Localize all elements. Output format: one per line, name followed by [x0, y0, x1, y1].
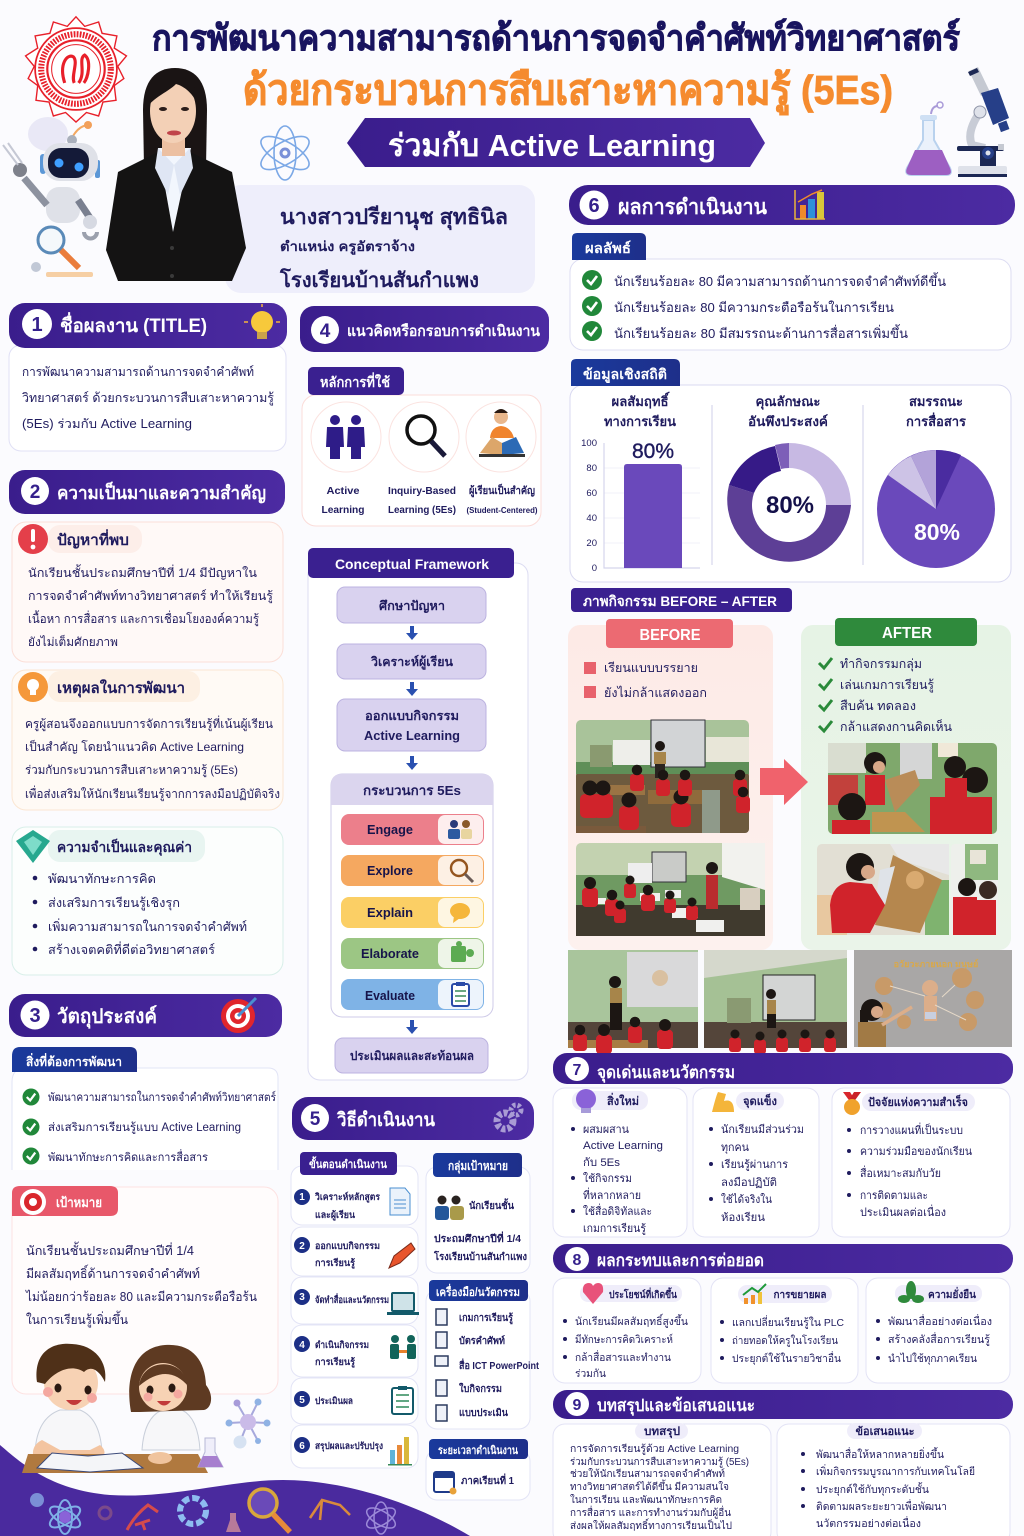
card: goal: นักเรียนชั้นประถมศึกษาปีที่ 1/4	[26, 1241, 194, 1258]
header 9	[553, 1390, 1013, 1419]
banner: with active learning: ร่วมกับ Active Learning	[388, 128, 716, 163]
card: problem: การจดจำคำศัพท์ทางวิทยาศาสตร์ ทำให้เรียนรู้	[28, 589, 274, 604]
illustration: two students reading	[22, 1344, 223, 1473]
panel: after: กล้าแสดงกานคิดเห็น	[840, 719, 952, 734]
tab: after: AFTER	[882, 625, 932, 642]
card: benefits: มีทักษะการคิดวิเคราะห์	[575, 1333, 673, 1346]
card: statistics: คุณลักษณะ	[756, 394, 821, 410]
steps list: 4	[299, 1340, 305, 1351]
banner: with active learning	[347, 118, 765, 167]
duration card: ภาคเรียนที่ 1	[461, 1473, 514, 1487]
icon: magnifier	[407, 416, 445, 456]
icons: science decorations	[30, 1489, 398, 1534]
icon: gears	[497, 1105, 521, 1129]
panel: 5Es process: กระบวนการ 5Es	[363, 783, 461, 798]
header 4: 4	[320, 321, 331, 342]
card: new things: ผสมผสาน	[583, 1124, 629, 1136]
icon: people	[326, 415, 365, 459]
photo: teacher at screen 2	[704, 950, 847, 1054]
card: principles: Learning	[322, 504, 364, 516]
steps list: การเรียนรู้	[315, 1257, 356, 1270]
target group card: ประถมศึกษาปีที่ 1/4	[434, 1231, 521, 1245]
header 2	[9, 470, 285, 514]
panel: before: เรียนแบบบรรยาย	[604, 661, 698, 675]
step: evaluate	[341, 979, 484, 1010]
card: strengths: ใช้ได้จริงใน	[721, 1193, 772, 1206]
donut chart: desired characteristics: 80%	[766, 492, 814, 519]
card: conclusion: การสื่อสาร และการทำงานร่วมกับผู้อื่น	[570, 1505, 731, 1519]
card: statistics: ทางการเรียน	[604, 414, 676, 429]
card: benefits: ร่วมกัน	[575, 1368, 606, 1380]
step icons	[387, 1188, 419, 1466]
steps list: ดำเนินกิจกรรม	[315, 1340, 369, 1351]
photo: teacher pointing at body diagram: อวัยวะภายนอก มนุษย์	[894, 958, 978, 970]
illustration: robot	[3, 117, 100, 277]
header 3: วัตถุประสงค์	[57, 1005, 157, 1029]
bar chart: learning achievement: 100	[581, 438, 597, 449]
tab: outcomes	[572, 233, 646, 260]
card: rationale: เป็นสำคัญ โดยนำแนวคิด Active Learning	[25, 739, 244, 754]
header 6: ผลการดำเนินงาน	[618, 196, 768, 219]
panel: 5Es process	[331, 774, 493, 1017]
title line 2: ด้วยกระบวนการสืบเสาะหาความรู้ (5Es)	[243, 67, 893, 116]
steps list: สรุปผลและปรับปรุง	[315, 1440, 383, 1452]
card: success factors: การวางแผนที่เป็นระบบ	[860, 1122, 963, 1137]
tab: steps	[300, 1152, 397, 1175]
panel: before	[568, 619, 773, 950]
tab: tools: เครื่องมือ/นวัตกรรม	[436, 1283, 520, 1299]
card: success factors: สื่อเหมาะสมกับวัย	[860, 1165, 941, 1180]
header 8: 8	[573, 1252, 582, 1269]
card: sustainability: พัฒนาสื่ออย่างต่อเนื่อง	[888, 1314, 992, 1328]
steps list	[291, 1152, 419, 1468]
card: conclusion: ร่วมกับกระบวนการสืบเสาะหาความรู้ (5Es)	[570, 1456, 749, 1468]
icon: molecule	[226, 1398, 270, 1448]
card: strengths: จุดแข็ง	[743, 1093, 777, 1109]
icon: medal	[843, 1092, 861, 1115]
duration card	[426, 1439, 530, 1500]
card: principles	[302, 367, 541, 526]
steps list: 2	[299, 1241, 305, 1252]
card: benefits: นักเรียนมีผลสัมฤทธิ์สูงขึ้น	[575, 1313, 688, 1328]
step: elaborate	[341, 938, 484, 969]
card: development goals	[12, 1047, 278, 1170]
steps list: การเรียนรู้	[315, 1356, 356, 1369]
card: new things: สิ่งใหม่	[607, 1092, 639, 1108]
card: new things: ใช้กิจกรรม	[583, 1172, 632, 1185]
title line 1: การพัฒนาความสามารถด้านการจดจำคำศัพท์วิทยาศาสตร์	[152, 18, 960, 58]
card: strengths: เรียนรู้ผ่านการ	[721, 1158, 788, 1171]
school name: โรงเรียนบ้านสันกำแพง	[279, 267, 479, 292]
bar chart: learning achievement: 60	[586, 488, 597, 499]
icon: purple bulb	[576, 1089, 596, 1113]
card: success factors: การติดตามและ	[860, 1190, 928, 1202]
step: evaluate and reflect: ประเมินผลและสะท้อนผล	[350, 1049, 474, 1063]
card: benefits: ประโยชน์ที่เกิดขึ้น	[609, 1287, 677, 1301]
header 8: ผลกระทบและการต่อยอด	[597, 1251, 764, 1270]
teacher name: นางสาวปรียานุช สุทธินิล	[280, 205, 508, 231]
photo: classroom lecture 2	[576, 843, 765, 936]
tools and innovations card	[426, 1280, 540, 1429]
tab: principles used: หลักการที่ใช้	[320, 372, 390, 390]
card: recommendations	[777, 1423, 1010, 1536]
card: recommendations: ติดตามผลระยะยาวเพื่อพัฒนา	[816, 1499, 947, 1513]
card: rationale: ครูผู้สอนจึงออกแบบการจัดการเรียนรู้ที่เน้นผู้เรียน	[25, 715, 273, 732]
card: statistics: ผลสัมฤทธิ์	[612, 391, 670, 409]
bar chart: learning achievement: 20	[586, 538, 597, 549]
step: explain: Explain	[367, 905, 413, 920]
card: development goals: พัฒนาความสามารถในการจดจำคำศัพท์วิทยาศาสตร์	[48, 1090, 276, 1104]
card: new things	[553, 1088, 687, 1237]
step: analyse learners	[337, 644, 486, 679]
tab: conceptual framework	[308, 548, 514, 578]
header 3: 3	[29, 1005, 41, 1027]
card: conclusion: ทางวิทยาศาสตร์ได้ดีขึ้น มีความสนใจ	[570, 1479, 729, 1493]
card: goal: ไม่น้อยกว่าร้อยละ 80 และมีความกระตือรือร้น	[25, 1290, 257, 1304]
photo: teacher at screen 1	[568, 950, 698, 1054]
card: principles: Learning (5Es)	[388, 504, 456, 516]
card: goal: เป้าหมาย	[56, 1195, 102, 1210]
tab: conceptual framework: Conceptual Framework	[335, 556, 489, 572]
icon: calendar	[434, 1472, 456, 1494]
bar chart: learning achievement: 40	[586, 513, 597, 524]
icon: light bulb	[244, 304, 280, 339]
bar chart: learning achievement: 0	[592, 563, 597, 574]
step: engage: Engage	[367, 822, 413, 837]
photo: students playing game	[828, 743, 997, 834]
header 9: บทสรุปและข้อเสนอแนะ	[597, 1396, 755, 1416]
steps list: วิเคราะห์หลักสูตร	[314, 1191, 381, 1204]
card: problem: ปัญหาที่พบ	[57, 529, 129, 549]
tab: tools	[429, 1280, 528, 1301]
card: problem	[12, 522, 283, 662]
icon: student with book	[479, 409, 525, 457]
card: expansion	[711, 1278, 858, 1383]
card: necessity and value: ส่งเสริมการเรียนรู้เชิงรุก	[48, 896, 180, 911]
step: design activities: ออกแบบกิจกรรม	[365, 709, 459, 723]
header 2: 2	[30, 482, 40, 503]
card: strengths	[693, 1088, 819, 1237]
panel: section 7 highlights	[553, 1053, 1013, 1237]
target group card: โรงเรียนบ้านสันกำแพง	[433, 1250, 527, 1263]
icon: microscope	[957, 67, 1009, 177]
card: necessity and value	[12, 827, 283, 975]
card: rationale: ร่วมกับกระบวนการสืบเสาะหาความรู้ (5Es)	[25, 763, 238, 778]
photo: students side view	[951, 844, 998, 935]
pie chart: communication competency: 80%	[914, 519, 960, 545]
tab: things to develop	[12, 1047, 137, 1072]
card: recommendations: ประยุกต์ใช้กับทุกระดับชั้น	[816, 1482, 929, 1496]
header 7: จุดเด่นและนวัตกรรม	[597, 1063, 735, 1083]
step: explore: Explore	[367, 863, 413, 878]
panel: section 2 background	[9, 470, 285, 975]
card: sustainability: ความยั่งยืน	[928, 1286, 977, 1301]
icon: leaf	[898, 1281, 924, 1303]
card: conclusion: การจัดการเรียนรู้ด้วย Active Learning	[570, 1443, 739, 1455]
card: strengths: นักเรียนมีส่วนร่วม	[721, 1123, 804, 1136]
pie chart: communication competency	[877, 450, 995, 568]
card: new things: ที่หลากหลาย	[583, 1187, 641, 1202]
target group card	[426, 1153, 530, 1273]
tools and innovations card: บัตรคำศัพท์	[459, 1335, 505, 1347]
card: expansion: แลกเปลี่ยนเรียนรู้ใน PLC	[732, 1315, 844, 1329]
card: statistics: อันพึงประสงค์	[748, 414, 828, 429]
target group card: นักเรียนชั้น	[469, 1198, 514, 1212]
header 7	[553, 1053, 1013, 1084]
header 5: วิธีดำเนินงาน	[337, 1109, 435, 1131]
card: necessity and value: พัฒนาทักษะการคิด	[48, 872, 156, 886]
tab: before	[606, 619, 733, 648]
card: new things: กับ 5Es	[583, 1157, 621, 1169]
card: principles: Active	[326, 485, 360, 497]
steps list: 1	[299, 1192, 305, 1203]
header 4: แนวคิดหรือกรอบการดำเนินงาน	[347, 322, 541, 340]
tab: activity images before after	[571, 588, 792, 612]
title text: วิทยาศาสตร์ ด้วยกระบวนการสืบเสาะหาความรู้	[22, 391, 274, 406]
card: strengths: ทุกคน	[721, 1142, 749, 1154]
step: evaluate: Evaluate	[365, 988, 415, 1003]
card: outcomes: นักเรียนร้อยละ 80 มีสมรรถนะด้านการสื่อสารเพิ่มขึ้น	[614, 324, 908, 341]
tab: steps: ขั้นตอนดำเนินงาน	[309, 1156, 387, 1171]
header 8	[553, 1244, 1013, 1273]
card: expansion: ถ่ายทอดให้ครูในโรงเรียน	[732, 1334, 838, 1347]
panel: conceptual framework	[308, 548, 528, 1080]
step: engage	[341, 814, 484, 845]
panel: teacher info card	[225, 185, 535, 293]
icon: two students	[435, 1196, 464, 1220]
card: expansion: ประยุกต์ใช้ในรายวิชาอื่น	[732, 1351, 841, 1365]
card: rationale: เพื่อส่งเสริมให้นักเรียนเรียนรู้จากการลงมือปฏิบัติจริง	[25, 785, 280, 802]
panel: after: ทำกิจกรรมกลุ่ม	[840, 657, 922, 672]
header 5: 5	[310, 1109, 321, 1130]
steps list: 3	[299, 1292, 305, 1303]
panel: section 1 title	[9, 303, 287, 451]
card: outcomes: นักเรียนร้อยละ 80 มีความกระตือรือร้นในการเรียน	[614, 300, 894, 315]
icon: growth chart	[795, 190, 825, 219]
tools and innovations card: สื่อ ICT PowerPoint	[459, 1358, 540, 1372]
steps list: 6	[299, 1441, 305, 1452]
card: sustainability: นำไปใช้ทุกภาคเรียน	[888, 1352, 977, 1365]
panel: section 5 methods	[291, 1097, 540, 1500]
title text	[22, 365, 274, 431]
steps list: ออกแบบกิจกรรม	[315, 1241, 380, 1252]
card: sustainability	[866, 1278, 1010, 1383]
card: success factors: ปัจจัยแห่งความสำเร็จ	[868, 1094, 968, 1109]
header 2: ความเป็นมาและความสำคัญ	[57, 481, 266, 504]
bar chart: learning achievement	[581, 438, 700, 574]
tab: duration: ระยะเวลาดำเนินงาน	[438, 1444, 518, 1457]
step: design activities: Active Learning	[364, 729, 460, 743]
bar chart: learning achievement: 80%	[632, 440, 674, 463]
card: goal: มีผลสัมฤทธิ์ด้านการจดจำคำศัพท์	[26, 1264, 200, 1281]
card: new things: เกมการเรียนรู้	[583, 1222, 646, 1235]
step: study problem	[337, 587, 486, 623]
card: new things: Active Learning	[583, 1140, 663, 1152]
tab: outcomes: ผลลัพธ์	[585, 240, 631, 256]
tab: principles used	[308, 367, 404, 395]
header 6: 6	[588, 195, 600, 217]
title text: (5Es) ร่วมกับ Active Learning	[22, 417, 192, 431]
card: recommendations: เพิ่มกิจกรรมบูรณาการกับเทคโนโลยี	[816, 1464, 975, 1478]
card: benefits: กล้าสื่อสารและทำงาน	[575, 1350, 671, 1364]
panel: section 4 framework	[300, 306, 549, 1080]
panel: section 8 impact	[553, 1244, 1013, 1383]
teacher position: ตำแหน่ง ครูอัตราจ้าง	[280, 239, 415, 255]
header 1: ชื่อผลงาน (TITLE)	[60, 312, 207, 337]
card: success factors	[832, 1088, 1010, 1237]
card: conclusion: ช่วยให้นักเรียนสามารถจดจำคำศัพท์	[570, 1468, 725, 1480]
card: necessity and value: เพิ่มความสามารถในการจดจำคำศัพท์	[48, 918, 247, 934]
icon: growth arrow	[743, 1284, 766, 1304]
step: study problem: ศึกษาปัญหา	[379, 599, 445, 613]
card: goal: ในการเรียนรู้เพิ่มขึ้น	[26, 1310, 128, 1328]
card: recommendations: พัฒนาสื่อให้หลากหลายยิ่งขึ้น	[816, 1447, 944, 1461]
header 7: 7	[573, 1062, 582, 1079]
tab: statistics: ข้อมูลเชิงสถิติ	[583, 366, 667, 383]
portrait of teacher	[106, 68, 246, 281]
card: strengths: ลงมือปฏิบัติ	[721, 1176, 777, 1189]
bar chart: learning achievement: 80	[586, 463, 597, 474]
steps list: ประเมินผล	[315, 1395, 353, 1407]
icon: atom	[256, 126, 314, 180]
step: elaborate: Elaborate	[361, 946, 419, 961]
card: statistics	[570, 359, 1011, 582]
panel: section 6 results	[568, 185, 1015, 1054]
card: development goals: ส่งเสริมการเรียนรู้แบบ Active Learning	[48, 1121, 241, 1134]
card: sustainability: สร้างคลังสื่อการเรียนรู้	[888, 1332, 990, 1346]
card: outcomes: นักเรียนร้อยละ 80 มีความสามารถด้านการจดจำคำศัพท์ดีขึ้น	[614, 272, 946, 289]
card: recommendations: ข้อเสนอแนะ	[856, 1425, 915, 1438]
card: statistics: สมรรถนะ	[909, 394, 963, 409]
tool icons	[435, 1309, 448, 1421]
steps list: จัดทำสื่อและนวัตกรรม	[315, 1292, 389, 1306]
card: success factors: ความร่วมมือของนักเรียน	[860, 1145, 972, 1158]
card: principles: Inquiry-Based	[388, 485, 456, 497]
step: analyse learners: วิเคราะห์ผู้เรียน	[370, 654, 453, 670]
header 1	[9, 303, 287, 348]
header 6	[569, 185, 1015, 225]
card: strengths: ห้องเรียน	[721, 1211, 765, 1224]
card: rationale: เหตุผลในการพัฒนา	[57, 679, 185, 698]
footer wave	[0, 1445, 470, 1536]
card: problem: นักเรียนชั้นประถมศึกษาปีที่ 1/4 มีปัญหาใน	[28, 564, 257, 580]
header 4	[300, 306, 549, 352]
tools and innovations card: เกมการเรียนรู้	[459, 1312, 514, 1325]
step: explore	[341, 855, 484, 886]
card: rationale	[12, 670, 283, 810]
card: conclusion	[553, 1423, 771, 1536]
panel: after: สืบค้น ทดลอง	[840, 699, 916, 713]
photo: student and game board	[817, 844, 949, 935]
step: explain	[341, 897, 484, 928]
title text: การพัฒนาความสามารถด้านการจดจำคำศัพท์	[22, 365, 254, 379]
tools and innovations card: แบบประเมิน	[459, 1407, 508, 1419]
photo: teacher pointing at body diagram	[854, 950, 1012, 1047]
card: outcomes	[570, 233, 1011, 350]
card: problem: ยังไม่เต็มศักยภาพ	[28, 634, 118, 649]
header 9: 9	[573, 1397, 582, 1414]
tab: activity images before after: ภาพกิจกรรม BEFORE – AFTER	[583, 593, 777, 609]
card: principles: (Student-Centered)	[466, 505, 538, 515]
card: recommendations: นวัตกรรมอย่างต่อเนื่อง	[816, 1516, 921, 1530]
card: new things: ใช้สื่อดิจิทัลและ	[583, 1203, 652, 1218]
icon: heart	[583, 1283, 603, 1304]
icon: school seal logo	[26, 17, 126, 122]
card: necessity and value: ความจำเป็นและคุณค่า	[57, 838, 192, 856]
header 1: 1	[31, 314, 43, 336]
step: evaluate and reflect	[335, 1038, 488, 1073]
tab: before: BEFORE	[640, 627, 701, 644]
card: principles: ผู้เรียนเป็นสำคัญ	[469, 483, 535, 498]
tab: statistics	[571, 359, 680, 386]
card: development goals: พัฒนาทักษะการคิดและการสื่อสาร	[48, 1149, 208, 1164]
steps list: 5	[299, 1395, 305, 1406]
tab: target group: กลุ่มเป้าหมาย	[448, 1159, 508, 1174]
tab: things to develop: สิ่งที่ต้องการพัฒนา	[26, 1053, 122, 1069]
card: conclusion: บทสรุป	[644, 1425, 680, 1439]
card: problem: เนื้อหา การสื่อสาร และการเชื่อมโยงองค์ความรู้	[28, 610, 260, 627]
tab: after	[835, 618, 977, 646]
card: conclusion: ส่งผลให้ผลสัมฤทธิ์ทางการเรียนเป็นไป	[570, 1518, 732, 1532]
card: success factors: ประเมินผลต่อเนื่อง	[860, 1204, 946, 1219]
card: statistics: การสื่อสาร	[906, 412, 966, 429]
card: expansion: การขยายผล	[774, 1289, 826, 1301]
header 3	[9, 994, 282, 1037]
card: conclusion: ในการเรียน และพัฒนาทักษะการคิด	[570, 1494, 722, 1506]
icon: flask	[906, 102, 951, 175]
photo: classroom lecture 1	[576, 720, 750, 833]
arrow: before to after	[760, 759, 808, 805]
tools and innovations card: ใบกิจกรรม	[459, 1382, 502, 1395]
donut chart: desired characteristics	[727, 443, 851, 562]
panel: after	[801, 618, 1011, 950]
panel: section 9 conclusion	[553, 1390, 1013, 1536]
card: benefits	[553, 1278, 701, 1383]
panel: before: ยังไม่กล้าแสดงออก	[604, 686, 707, 700]
steps list: และผู้เรียน	[315, 1209, 355, 1222]
icon: muscle	[712, 1092, 734, 1112]
panel: section 3 objectives	[9, 994, 282, 1394]
panel: after: เล่นเกมการเรียนรู้	[840, 678, 934, 693]
icon: target	[221, 998, 256, 1033]
card: necessity and value: สร้างเจตคติที่ดีต่อวิทยาศาสตร์	[48, 941, 215, 957]
header 5	[292, 1097, 534, 1140]
step: design activities	[337, 699, 486, 751]
card: goal	[12, 1186, 278, 1394]
